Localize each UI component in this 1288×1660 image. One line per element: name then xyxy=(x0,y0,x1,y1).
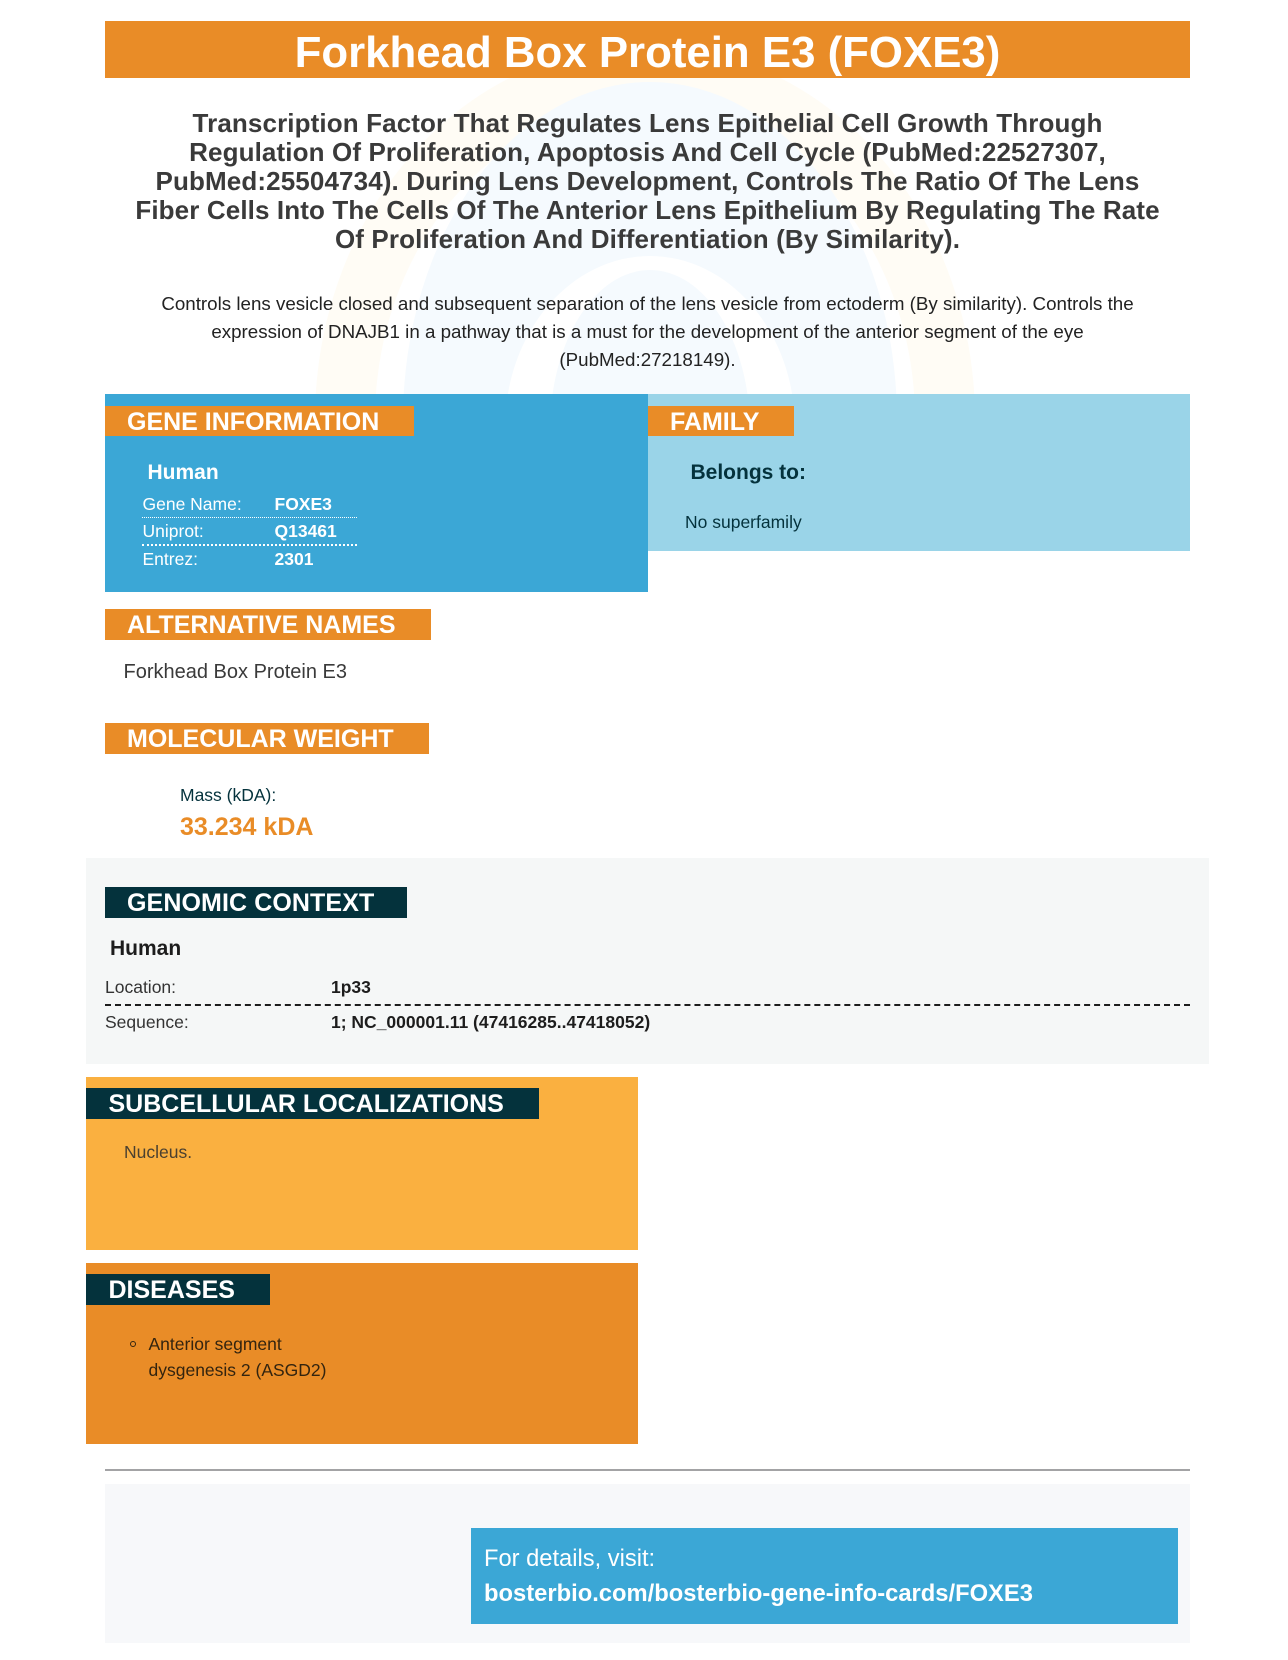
location row xyxy=(105,975,1190,1006)
heading: subcellular localizations: SUBCELLULAR LOCALIZATIONS xyxy=(108,1090,504,1118)
panel: gene information xyxy=(105,394,648,592)
superfamily value: No superfamily xyxy=(685,512,802,532)
location row: 1p33 xyxy=(331,977,371,997)
species label: Human xyxy=(148,461,219,484)
localization value: Nucleus. xyxy=(124,1142,192,1162)
subtitle: protein function summary: Fiber Cells Into The Cells Of The Anterior Lens Epithelium By Regulating The Rate xyxy=(135,195,1160,225)
title banner xyxy=(105,21,1190,78)
heading: alternative names: ALTERNATIVE NAMES xyxy=(127,611,396,639)
panel: genomic context xyxy=(86,858,1209,1064)
subtitle: protein function summary: Of Proliferation And Differentiation (By Similarity). xyxy=(335,224,960,254)
disease name: dysgenesis 2 (ASGD2) xyxy=(148,1360,326,1380)
callout: details link xyxy=(471,1528,1178,1624)
heading: family: FAMILY xyxy=(670,408,759,436)
subtitle: protein function summary: PubMed:25504734). During Lens Development, Controls The Ratio Of The Lens xyxy=(156,166,1139,196)
heading: molecular weight: MOLECULAR WEIGHT xyxy=(127,725,394,753)
description paragraph: (PubMed:27218149). xyxy=(559,349,736,370)
belongs to label: Belongs to: xyxy=(690,461,806,484)
mass value: 33.234 kDA xyxy=(180,812,313,840)
panel: diseases xyxy=(86,1263,638,1444)
uniprot row xyxy=(142,518,357,546)
entrez row xyxy=(142,549,313,569)
footer divider xyxy=(105,1469,1190,1471)
heading: gene information: GENE INFORMATION xyxy=(127,408,379,436)
heading: diseases: DISEASES xyxy=(108,1276,235,1304)
sequence row: 1; NC_000001.11 (47416285..47418052) xyxy=(331,1012,650,1032)
bullet xyxy=(130,1341,136,1347)
callout label: For details, visit: xyxy=(484,1546,655,1572)
panel: family xyxy=(648,394,1190,551)
gene name row: Gene Name: xyxy=(142,494,242,514)
panel: footer xyxy=(105,1484,1190,1643)
subtitle: protein function summary: Transcription Factor That Regulates Lens Epithelial Cell Growth Through xyxy=(193,108,1102,138)
heading: genomic context: GENOMIC CONTEXT xyxy=(127,889,374,917)
mass label: Mass (kDA): xyxy=(180,785,276,805)
alternative name value: Forkhead Box Protein E3 xyxy=(124,661,347,683)
location row: Location: xyxy=(105,977,176,997)
callout url: bosterbio.com/bosterbio-gene-info-cards/FOXE3 xyxy=(484,1580,1033,1607)
entrez row: Entrez: xyxy=(142,549,198,569)
species label: Human xyxy=(110,937,181,960)
disease name: Anterior segment xyxy=(148,1334,282,1354)
description paragraph: Controls lens vesicle closed and subsequent separation of the lens vesicle from ectoderm (By similarity). Controls the xyxy=(161,293,1134,314)
title banner: Forkhead Box Protein E3 (FOXE3) xyxy=(295,28,1000,77)
sequence row: Sequence: xyxy=(105,1012,189,1032)
gene name row: FOXE3 xyxy=(274,494,332,514)
background watermark logo xyxy=(316,78,974,394)
heading: diseases xyxy=(86,1274,270,1305)
gene name row xyxy=(142,492,357,518)
heading: family xyxy=(648,406,794,436)
uniprot row: Uniprot: xyxy=(142,521,204,541)
description paragraph xyxy=(161,293,1134,370)
sequence row xyxy=(105,1012,650,1032)
entrez row: 2301 xyxy=(274,549,313,569)
disease list item xyxy=(130,1334,326,1380)
disease name xyxy=(148,1334,326,1380)
panel: subcellular localizations xyxy=(86,1077,638,1250)
uniprot row: Q13461 xyxy=(274,521,337,541)
subtitle: protein function summary xyxy=(135,108,1160,254)
description paragraph: expression of DNAJB1 in a pathway that is a must for the development of the anterior segment of the eye xyxy=(211,321,1084,342)
subtitle: protein function summary: Regulation Of Proliferation, Apoptosis And Cell Cycle (PubMed:22527307, xyxy=(189,137,1106,167)
